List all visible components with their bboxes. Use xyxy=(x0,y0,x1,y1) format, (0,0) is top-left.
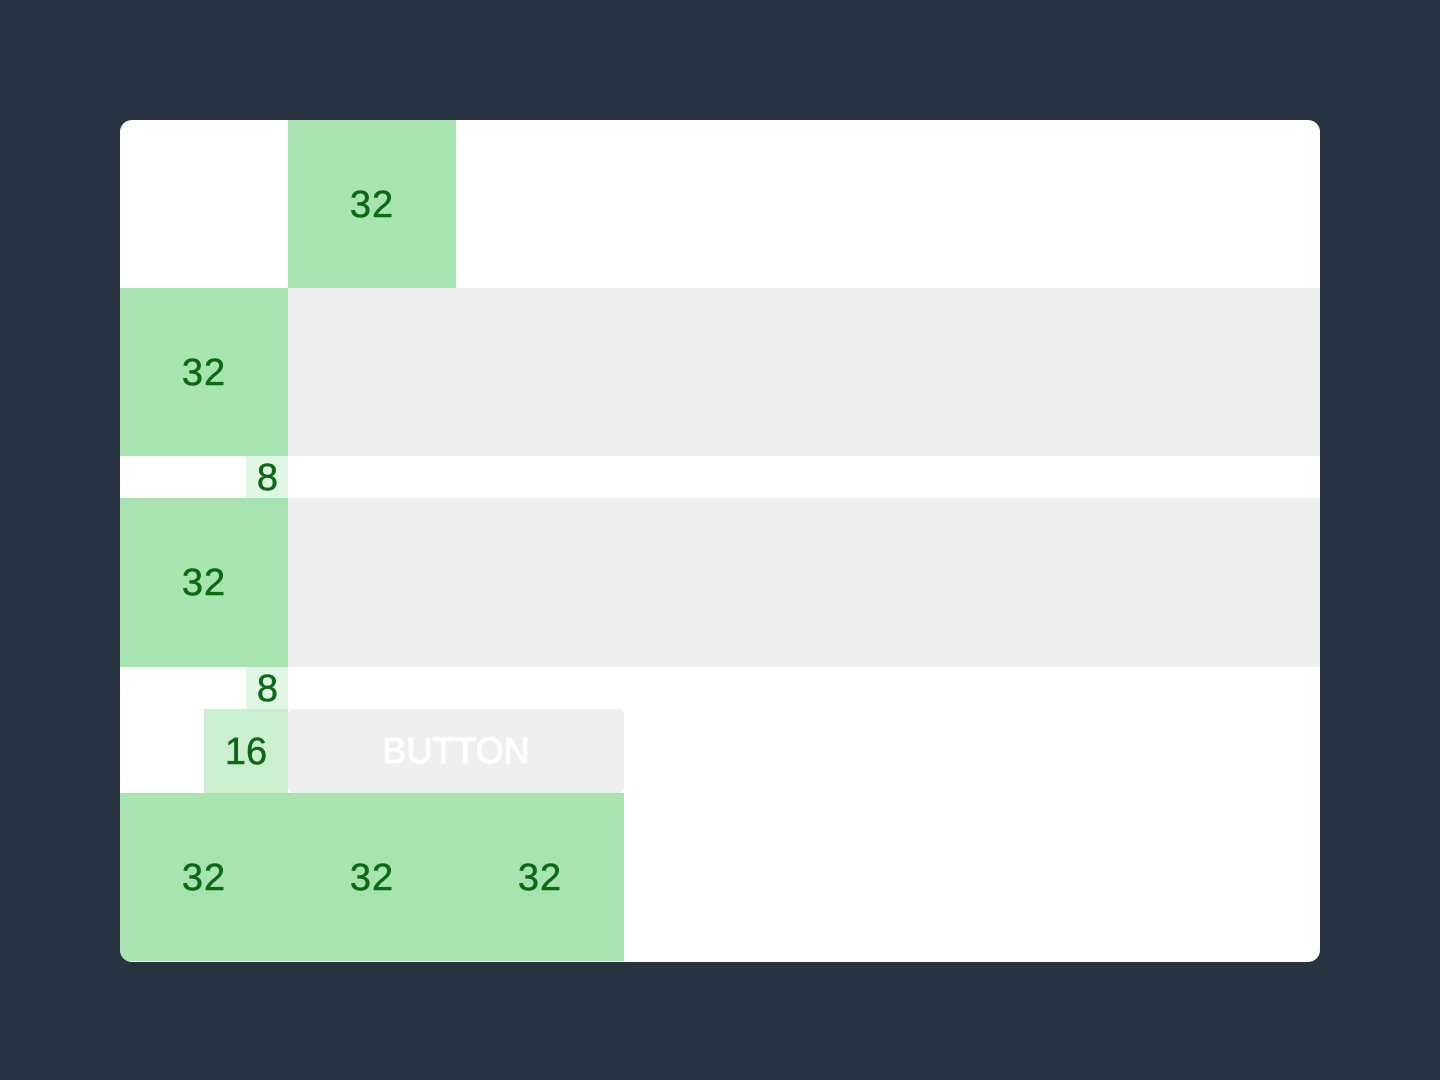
bottom spacer 32 right xyxy=(456,793,624,961)
spacer 32 top xyxy=(288,120,456,288)
bottom spacer 32 middle xyxy=(288,793,456,961)
spacer 8 second xyxy=(246,667,288,709)
spacer 16 xyxy=(204,709,288,793)
spacer 8 first xyxy=(246,456,288,498)
spacer 32 left of row 2 xyxy=(120,498,288,667)
spacer 8 second: 8 xyxy=(257,668,279,710)
button xyxy=(288,709,624,793)
button: BUTTON xyxy=(382,730,530,771)
content row 1 xyxy=(288,288,1320,456)
bottom spacer 32 middle: 32 xyxy=(350,856,394,898)
bottom spacer 32 left: 32 xyxy=(182,856,226,898)
spacer 32 top: 32 xyxy=(350,184,394,226)
spacer 32 left of row 2: 32 xyxy=(182,562,226,604)
bottom spacer 32 left xyxy=(120,793,288,961)
spacer 32 left of row 1: 32 xyxy=(182,352,226,394)
bottom spacer 32 right: 32 xyxy=(518,856,562,898)
spacer 16: 16 xyxy=(225,730,267,772)
spacer 32 left of row 1 xyxy=(120,288,288,456)
card panel xyxy=(120,120,1320,962)
spacer 8 first: 8 xyxy=(257,456,279,498)
content row 2 xyxy=(288,498,1320,667)
